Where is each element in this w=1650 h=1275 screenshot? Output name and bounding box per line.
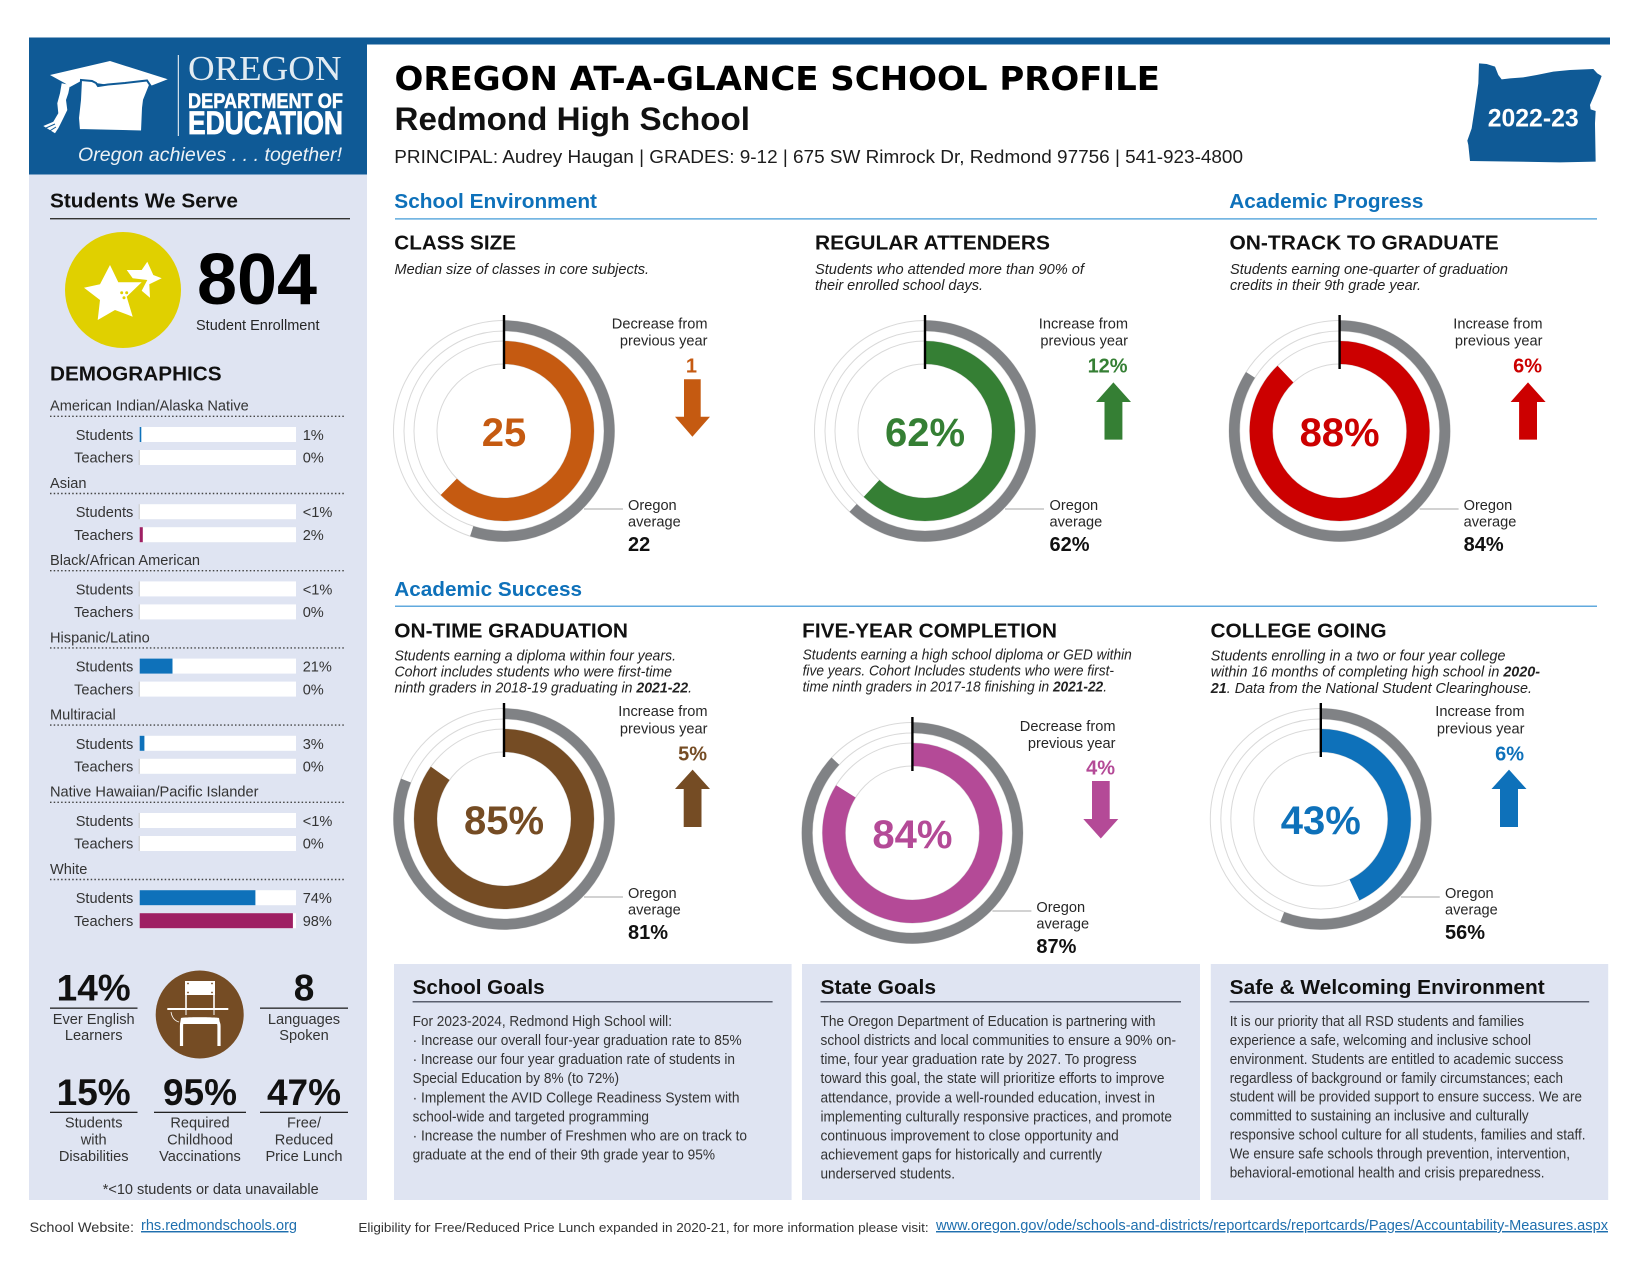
safe and welcoming text: experience a safe, welcoming and inclusive school <box>1230 1033 1531 1049</box>
metric description <box>394 648 692 697</box>
donut chart: regular attenders 62%: 62% <box>885 411 965 455</box>
demographic group: White <box>50 862 346 930</box>
Oregon average callout: 56% <box>1445 922 1485 944</box>
school goals text: For 2023-2024, Redmond High School will: <box>413 1014 672 1030</box>
demographic group: Hispanic/Latino: 0% <box>303 682 324 698</box>
panel: students we serve <box>50 190 350 348</box>
stat: languages spoken: 8 <box>294 968 314 1009</box>
donut chart: class size 25: 25 <box>482 411 526 455</box>
metric description: Cohort includes students who were first-time <box>394 664 672 680</box>
panel: five-year completion <box>802 620 1132 958</box>
safe and welcoming text: environment. Students are entitled to academic success <box>1230 1052 1563 1068</box>
demographic group: Asian: <1% <box>303 505 332 521</box>
demographic group: Native Hawaiian/Pacific Islander: Students <box>76 814 133 830</box>
change label: previous year <box>1455 334 1543 350</box>
stat: required childhood vaccinations: Required <box>170 1116 230 1132</box>
school goals text: Special Education by 8% (to 72%) <box>413 1071 619 1087</box>
panel: state goals <box>802 964 1200 1200</box>
title: OREGON AT-A-GLANCE SCHOOL PROFILE <box>394 59 1160 98</box>
stat: students with disabilities: Students <box>65 1116 123 1132</box>
Oregon average callout: average <box>1445 902 1498 918</box>
panel: safe and welcoming environment <box>1211 964 1608 1200</box>
demographic group: American Indian/Alaska Native: Students <box>76 428 133 444</box>
safe and welcoming text: behavioral-emotional health and crisis preparedness. <box>1230 1166 1544 1182</box>
stat: students with disabilities: Disabilities <box>59 1149 129 1165</box>
Oregon average callout: 62% <box>1050 534 1090 556</box>
footnote: *<10 students or data unavailable <box>103 1182 319 1198</box>
demographic group: Hispanic/Latino: Teachers <box>74 682 133 698</box>
demographic group: Hispanic/Latino: Hispanic/Latino <box>50 630 150 646</box>
state goals text: continuous improvement to close opportunity and <box>820 1128 1119 1144</box>
change label: previous year <box>620 334 708 350</box>
footer: school website: rhs.redmondschools.org <box>141 1218 297 1234</box>
Oregon average callout <box>584 886 681 944</box>
metric title: COLLEGE GOING <box>1210 620 1387 643</box>
demographic group: Asian: Teachers <box>74 528 133 544</box>
top blue band <box>29 38 1610 44</box>
stat: languages spoken: Spoken <box>279 1028 329 1044</box>
metric title: REGULAR ATTENDERS <box>815 231 1050 254</box>
change label: Increase from <box>1039 316 1128 332</box>
school goals text: · Implement the AVID College Readiness System with <box>413 1090 740 1106</box>
stat: ever English learners <box>50 968 138 1044</box>
demographic group: White: Teachers <box>74 914 133 930</box>
logo: Oregon Department of Education: EDUCATION <box>188 105 343 141</box>
school goals text: graduate at the end of their 9th grade year to 95% <box>413 1148 715 1164</box>
state goals text: school districts and local communities to ensure a 90% on- <box>820 1033 1176 1049</box>
demographic group: Asian: 2% <box>303 528 324 544</box>
Oregon average callout: average <box>1464 515 1516 531</box>
change label <box>1020 719 1116 780</box>
school goals text: school-wide and targeted programming <box>413 1110 649 1126</box>
stat: languages spoken: Languages <box>268 1012 340 1028</box>
change label: previous year <box>620 722 708 738</box>
state goals text: The Oregon Department of Education is partnering with <box>820 1014 1156 1030</box>
donut chart: on-track 88% <box>1229 315 1450 542</box>
stat: required childhood vaccinations: 95% <box>163 1072 237 1113</box>
footer: lunch eligibility note: Eligibility for Free/Reduced Price Lunch expanded in 2020-21, for more information please visit: <box>358 1220 929 1235</box>
state goals text <box>820 1014 1176 1182</box>
demographic group: Black/African American <box>50 553 346 621</box>
stat: free/reduced price lunch: Price Lunch <box>265 1149 343 1165</box>
metric description: Students who attended more than 90% of <box>815 262 1086 278</box>
metric description: Students earning a high school diploma or GED within <box>803 648 1132 664</box>
heading: School Environment: School Environment <box>394 190 597 213</box>
demographic group: Asian: Asian <box>50 476 87 492</box>
demographic group: Black/African American: Students <box>76 582 133 598</box>
demographic group: Hispanic/Latino <box>50 630 346 698</box>
change label: previous year <box>1040 334 1128 350</box>
panel: on-track to graduate <box>1229 231 1546 556</box>
arrow: increase <box>1492 770 1526 827</box>
Oregon average callout: 81% <box>628 922 668 944</box>
Oregon average callout: 22 <box>628 534 650 556</box>
metric description: within 16 months of completing high school in 2020- <box>1211 664 1540 680</box>
icon: school desk <box>156 970 244 1058</box>
Oregon average callout: 87% <box>1036 936 1077 958</box>
school goals text: · Increase our four year graduation rate of students in <box>413 1052 735 1068</box>
demographic group: Native Hawaiian/Pacific Islander: Native Hawaiian/Pacific Islander <box>50 785 259 801</box>
Oregon average callout: Oregon <box>628 498 677 514</box>
change label: Increase from <box>618 704 708 720</box>
arrow: decrease <box>1083 781 1118 838</box>
Oregon average callout: Oregon <box>1050 498 1098 514</box>
Oregon average callout <box>1401 886 1498 944</box>
demographic group: Black/African American: <1% <box>303 582 332 598</box>
metric title: ON-TIME GRADUATION <box>394 620 628 643</box>
metric description: ninth graders in 2018-19 graduating in 2021-22. <box>394 681 692 697</box>
donut chart: college going 43% <box>1210 703 1431 930</box>
change label: 5% <box>678 743 707 765</box>
arrow: increase <box>675 770 710 827</box>
donut chart: five-year completion 84%: 84% <box>872 813 952 857</box>
metric description: credits in their 9th grade year. <box>1230 278 1421 294</box>
heading: state goals: State Goals <box>820 977 936 999</box>
stat: ever English learners: Learners <box>65 1028 123 1044</box>
stat: free/reduced price lunch: 47% <box>267 1072 341 1113</box>
Oregon average callout <box>1420 498 1516 556</box>
logo: Oregon Department of Education: DEPARTMENT OF <box>188 90 343 113</box>
demographic group: American Indian/Alaska Native <box>50 399 346 467</box>
donut chart: regular attenders 62% <box>814 315 1036 542</box>
demographic group: White: Students <box>76 891 133 907</box>
demographic group: Multiracial: 3% <box>303 737 324 753</box>
school goals text: · Increase our overall four-year graduation rate to 85% <box>413 1033 742 1049</box>
donut chart: on-time graduation 85% <box>394 703 614 930</box>
demographic group: Native Hawaiian/Pacific Islander: <1% <box>303 814 332 830</box>
arrow: increase <box>1511 382 1546 440</box>
safe and welcoming text: committed to sustaining an inclusive and culturally <box>1230 1108 1529 1124</box>
donut chart: college going 43%: 43% <box>1281 799 1361 843</box>
enrollment label: Student Enrollment <box>196 318 320 334</box>
demographic group: American Indian/Alaska Native: 1% <box>303 428 324 444</box>
demographic group: American Indian/Alaska Native: Teachers <box>74 451 133 467</box>
footer: lunch eligibility note: www.oregon.gov/ode/schools-and-districts/reportcards/reportcards/Pages/Accountability-Measures.aspx <box>935 1218 1609 1234</box>
stat: required childhood vaccinations: Vaccinations <box>159 1149 241 1165</box>
icon: stars in yellow circle <box>65 232 181 348</box>
Oregon average callout: average <box>628 902 681 918</box>
demographic group: Native Hawaiian/Pacific Islander <box>50 785 346 853</box>
demographic group: Multiracial: Students <box>76 737 133 753</box>
arrow: decrease <box>675 379 710 437</box>
school details: PRINCIPAL: Audrey Haugan | GRADES: 9-12 | 675 SW Rimrock Dr, Redmond 97756 | 541-923-4800 <box>394 146 1243 167</box>
change label: previous year <box>1437 722 1525 738</box>
demographic group: Multiracial: 0% <box>303 760 324 776</box>
stat: students with disabilities: 15% <box>57 1072 131 1113</box>
Oregon average callout: Oregon <box>1036 900 1085 916</box>
state goals text: underserved students. <box>820 1166 955 1182</box>
heading: Academic Success: Academic Success <box>394 578 582 601</box>
stat: free/reduced price lunch <box>260 1072 348 1165</box>
panel: sidebar background <box>29 174 367 1200</box>
stat: students with disabilities <box>50 1072 138 1165</box>
change label: 6% <box>1495 743 1524 765</box>
panel: student statistics <box>50 968 348 1198</box>
metric title: ON-TRACK TO GRADUATE <box>1230 231 1499 254</box>
Oregon average callout: 84% <box>1464 534 1504 556</box>
change label <box>1453 316 1543 378</box>
stat: ever English learners: 14% <box>57 968 131 1009</box>
metric description <box>815 262 1086 294</box>
logo: Oregon Department of Education: Oregon achieves . . . together! <box>78 144 343 166</box>
Oregon average callout <box>992 900 1089 958</box>
demographic group: Multiracial: Multiracial <box>50 708 116 724</box>
demographic group: Native Hawaiian/Pacific Islander: Teachers <box>74 837 133 853</box>
Oregon average callout: Oregon <box>1464 498 1512 514</box>
demographic group: White: 98% <box>303 914 332 930</box>
panel: on-time graduation <box>394 620 710 944</box>
demographic group: Black/African American: Black/African American <box>50 553 200 569</box>
change label <box>612 316 708 378</box>
change label: Decrease from <box>612 316 708 332</box>
demographic group: White: White <box>50 862 87 878</box>
Oregon average callout <box>1005 498 1102 556</box>
metric description: their enrolled school days. <box>815 278 983 294</box>
footer: school website <box>30 1218 297 1235</box>
demographic group: Asian <box>50 476 346 544</box>
stat: required childhood vaccinations <box>154 1072 246 1165</box>
panel: school goals <box>394 964 792 1200</box>
demographic group: Multiracial: Teachers <box>74 760 133 776</box>
state goals text: toward this goal, the state will prioritize efforts to improve <box>820 1071 1164 1087</box>
stat: free/reduced price lunch: Reduced <box>275 1132 333 1148</box>
state goals text: achievement gaps for historically and currently <box>820 1148 1103 1164</box>
metric description: time ninth graders in 2017-18 finishing in 2021-22. <box>803 680 1107 696</box>
demographic group: Hispanic/Latino: 21% <box>303 660 332 676</box>
demographic group: Black/African American: Teachers <box>74 605 133 621</box>
change label: Decrease from <box>1020 719 1116 735</box>
donut chart: on-track 88%: 88% <box>1300 411 1380 455</box>
panel: class size <box>394 231 710 556</box>
change label: 1 <box>686 356 697 378</box>
school goals text <box>413 1014 747 1164</box>
demographic group: Multiracial <box>50 708 346 776</box>
state goals text: attendance, provide a well-rounded education, invest in <box>820 1090 1155 1106</box>
metric description: Students earning a diploma within four years. <box>394 648 676 664</box>
state goals text: implementing culturally responsive practices, and promote <box>820 1110 1172 1126</box>
change label <box>1039 316 1128 378</box>
heading: school goals: School Goals <box>413 977 545 999</box>
demographic group: Black/African American: 0% <box>303 605 324 621</box>
metric description <box>1210 648 1540 697</box>
metric title: FIVE-YEAR COMPLETION <box>802 620 1057 643</box>
metric description <box>803 648 1132 696</box>
metric description <box>1230 262 1508 294</box>
icon: Oregon year badge: 2022-23 <box>1488 105 1579 133</box>
demographic group: Native Hawaiian/Pacific Islander: 0% <box>303 837 324 853</box>
safe and welcoming text <box>1230 1014 1586 1182</box>
heading: students we serve: Students We Serve <box>50 190 238 212</box>
donut chart: five-year completion 84% <box>802 717 1023 944</box>
Oregon average callout: average <box>628 515 681 531</box>
Oregon average callout <box>584 498 681 556</box>
heading: demographics: DEMOGRAPHICS <box>50 362 222 385</box>
stat: free/reduced price lunch: Free/ <box>287 1116 322 1132</box>
demographic group: Hispanic/Latino: Students <box>76 660 133 676</box>
safe and welcoming text: responsive school culture for all students, families and staff. <box>1230 1128 1586 1144</box>
donut chart: on-time graduation 85%: 85% <box>464 799 544 843</box>
demographic group: American Indian/Alaska Native: 0% <box>303 451 324 467</box>
arrow: increase <box>1096 382 1131 440</box>
heading: safe and welcoming environment: Safe & Welcoming Environment <box>1230 977 1545 999</box>
change label: Increase from <box>1435 704 1524 720</box>
safe and welcoming text: regardless of background or family circumstances; each <box>1230 1071 1563 1087</box>
metric description: five years. Cohort Includes students who were first- <box>803 664 1114 680</box>
logo: Oregon Department of Education: OREGON <box>188 49 342 88</box>
change label <box>1435 704 1525 765</box>
stat: required childhood vaccinations: Childhood <box>167 1132 233 1148</box>
stat: students with disabilities: with <box>80 1132 107 1148</box>
demographic group: Asian: Students <box>76 505 133 521</box>
metric description: Students enrolling in a two or four year college <box>1211 648 1506 664</box>
icon: Oregon year badge <box>1467 63 1602 162</box>
donut chart: class size 25 <box>394 315 614 542</box>
metric title: CLASS SIZE <box>394 231 516 254</box>
change label: 6% <box>1513 356 1542 378</box>
metric description: Students earning one-quarter of graduation <box>1230 262 1508 278</box>
enrollment number: 804 <box>197 240 317 320</box>
metric description: Median size of classes in core subjects. <box>394 262 649 278</box>
Oregon average callout: Oregon <box>1445 886 1494 902</box>
demographic group: American Indian/Alaska Native: American Indian/Alaska Native <box>50 399 249 415</box>
change label: Increase from <box>1453 316 1542 332</box>
demographic group: White: 74% <box>303 891 332 907</box>
panel: college going <box>1210 620 1540 944</box>
panel: demographics <box>50 362 346 930</box>
panel: regular attenders <box>814 231 1131 556</box>
school name: Redmond High School <box>394 101 750 137</box>
footer: school website: School Website: <box>30 1219 134 1235</box>
heading: Academic Progress: Academic Progress <box>1229 190 1423 213</box>
Oregon average callout: average <box>1036 916 1089 932</box>
school goals text: · Increase the number of Freshmen who are on track to <box>413 1128 747 1144</box>
change label <box>618 704 708 765</box>
footer: lunch eligibility note <box>358 1218 1609 1235</box>
state goals text: time, four year graduation rate by 2027. To progress <box>820 1052 1137 1068</box>
change label: 12% <box>1088 356 1128 378</box>
safe and welcoming text: It is our priority that all RSD students and families <box>1230 1014 1524 1030</box>
stat: languages spoken <box>260 968 348 1044</box>
safe and welcoming text: We ensure safe schools through prevention, intervention, <box>1230 1146 1570 1162</box>
change label: previous year <box>1028 736 1116 752</box>
stat: ever English learners: Ever English <box>53 1012 135 1028</box>
safe and welcoming text: student will be provided support to ensure success. We are <box>1230 1090 1582 1106</box>
Oregon average callout: average <box>1050 515 1102 531</box>
change label: 4% <box>1086 758 1115 780</box>
Oregon average callout: Oregon <box>628 886 677 902</box>
logo: Oregon Department of Education <box>29 38 367 174</box>
metric description: 21. Data from the National Student Clearinghouse. <box>1210 681 1532 697</box>
